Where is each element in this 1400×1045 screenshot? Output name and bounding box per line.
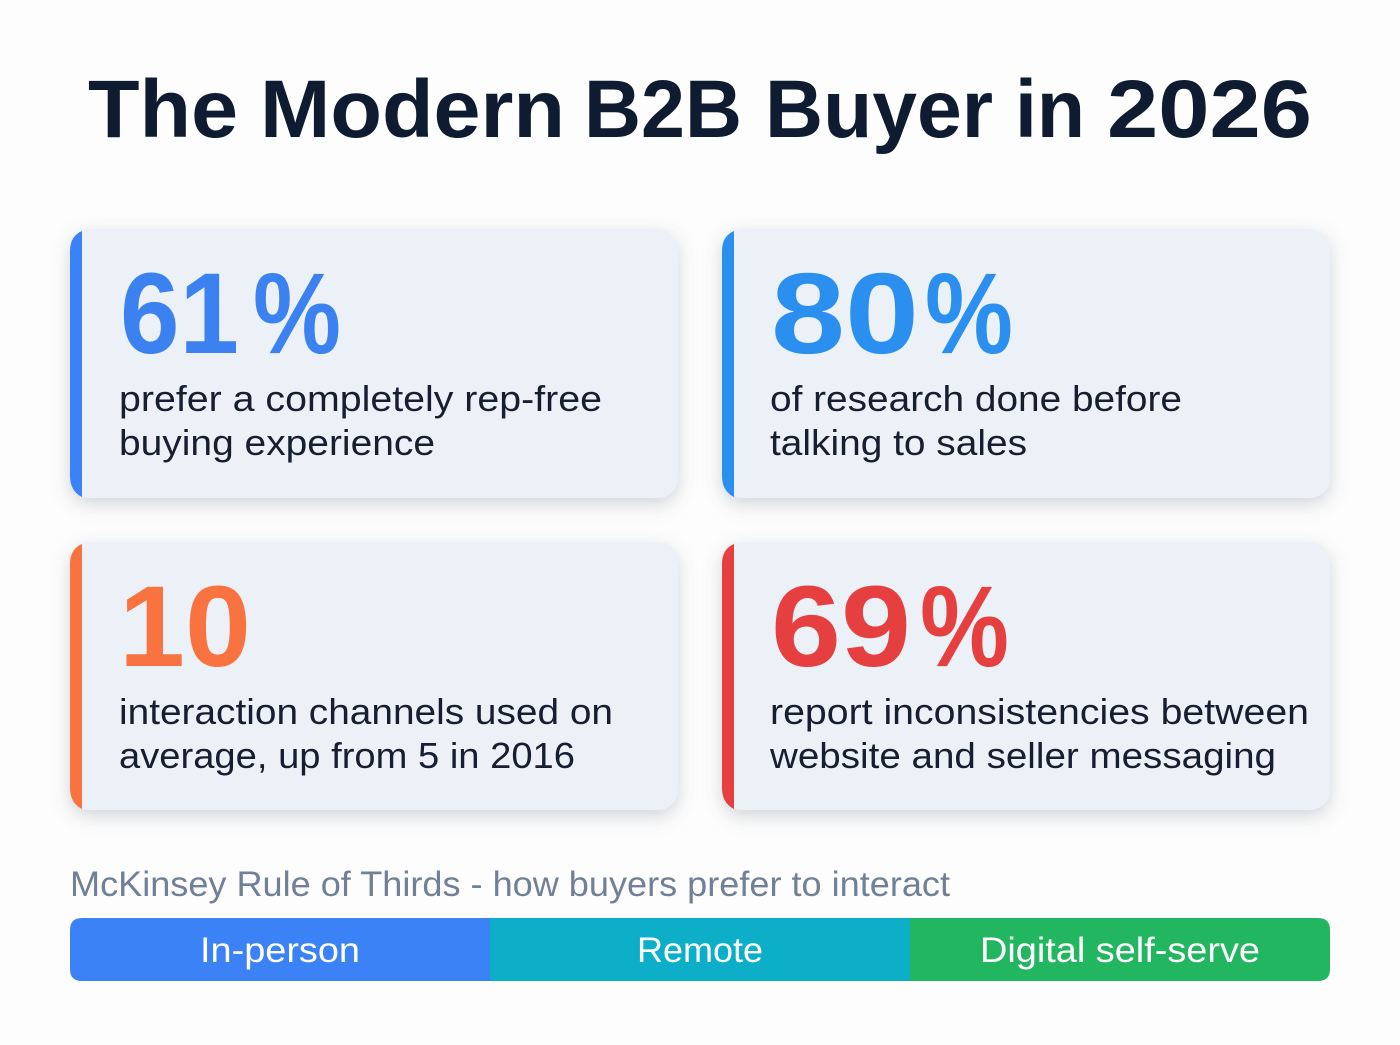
- title: The: [88, 64, 238, 155]
- stat: 80%: %: [925, 250, 1013, 378]
- title: Buyer: [765, 64, 993, 155]
- description: rep-free: buying experience: [119, 422, 435, 463]
- panel: 61% rep-free: [70, 229, 678, 498]
- accent bar: blue: [70, 231, 82, 497]
- rule of thirds heading: McKinsey Rule of Thirds - how buyers prefer to interact: [70, 865, 950, 904]
- stat: 61%: %: [253, 250, 341, 378]
- accent bar: red: [722, 544, 734, 809]
- segment: digital self-serve: Digital self-serve: [980, 931, 1260, 970]
- segment: remote: [490, 918, 910, 981]
- rule of thirds bar: [70, 918, 1330, 981]
- stat: 10: 10: [119, 563, 251, 691]
- description: channels: average, up from 5 in 2016: [119, 735, 575, 776]
- stat: 61%: 61: [120, 250, 239, 378]
- segment: digital self-serve: [910, 918, 1330, 981]
- description: channels: interaction channels used on: [119, 691, 613, 732]
- stat: 69%: 69: [771, 563, 911, 691]
- accent bar: orange: [70, 544, 82, 809]
- panel: 10 channels: [70, 542, 678, 810]
- description: rep-free: [119, 378, 602, 463]
- description: inconsistencies: report inconsistencies between: [770, 691, 1309, 732]
- title: B2B: [584, 64, 742, 155]
- accent bar: sky blue: [722, 231, 734, 497]
- description: research: talking to sales: [770, 422, 1027, 463]
- description: research: of research done before: [770, 378, 1182, 419]
- description: channels: [119, 691, 613, 776]
- stat: 80%: 80: [771, 250, 919, 378]
- description: inconsistencies: website and seller messaging: [769, 735, 1276, 776]
- stat: 69%: %: [920, 563, 1009, 691]
- stat: 80%: [771, 250, 1013, 378]
- title: in: [1015, 64, 1085, 155]
- segment: in-person: In-person: [200, 931, 360, 970]
- description: research: [770, 378, 1182, 463]
- panel: 80% research: [722, 229, 1330, 498]
- description: rep-free: prefer a completely rep-free: [119, 378, 602, 419]
- title: 2026: [1107, 64, 1312, 155]
- segment: in-person: [70, 918, 490, 981]
- stat: 61%: [120, 250, 341, 378]
- title: [88, 64, 1312, 155]
- stat: 69%: [771, 563, 1009, 691]
- description: inconsistencies: [769, 691, 1309, 776]
- panel: 69% inconsistencies: [722, 542, 1330, 810]
- title: Modern: [260, 64, 565, 155]
- segment: remote: Remote: [637, 931, 763, 970]
